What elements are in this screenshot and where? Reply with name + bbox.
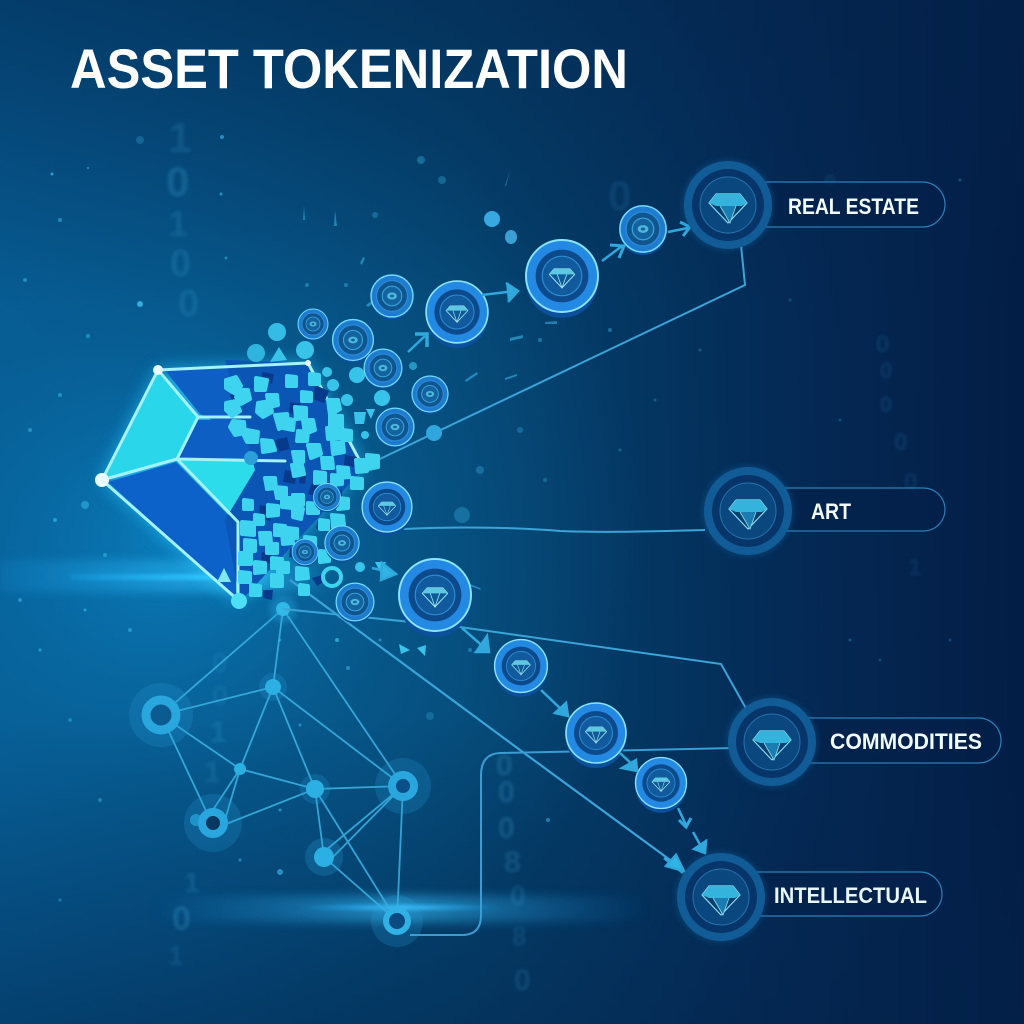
horizontal light flare, left <box>0 560 330 592</box>
node icon <box>702 465 794 557</box>
coin <box>364 349 402 389</box>
arrow <box>408 334 427 352</box>
label pill <box>740 182 945 227</box>
background binary digit columns: 1 <box>210 716 227 749</box>
coin <box>314 484 340 512</box>
network node: small center-left <box>234 763 246 775</box>
background binary digit columns: 1 <box>168 114 191 161</box>
background binary digit columns: 0 <box>496 749 513 782</box>
network node: center <box>300 774 330 804</box>
gem facet: top blue <box>164 363 345 455</box>
background binary digit columns: 0 <box>212 647 228 678</box>
arrow <box>541 690 568 716</box>
gem right dark side <box>225 360 365 602</box>
background binary digit columns: 0 <box>876 331 889 358</box>
label: COMMODITIES <box>830 729 982 754</box>
background binary digit columns: 0 <box>170 243 191 285</box>
network node: top hub <box>269 595 297 623</box>
connector: bottom node to commodities <box>410 748 735 935</box>
coin <box>636 758 686 813</box>
background binary digit columns: 8 <box>504 846 521 879</box>
gem small triangle <box>217 568 231 582</box>
label: ART <box>811 499 851 524</box>
gem: shattering diamond <box>95 360 378 609</box>
background binary digit columns: 1 <box>204 756 221 789</box>
coin <box>362 482 412 536</box>
label pill <box>735 872 942 916</box>
connector: to intellectual <box>290 580 681 868</box>
background binary digit columns: 0 <box>880 358 892 383</box>
background binary digit columns: 1 <box>908 554 921 581</box>
coin <box>298 309 328 341</box>
arrow <box>664 855 684 873</box>
coin <box>333 320 373 363</box>
horizontal light flare, bottom <box>150 896 650 922</box>
label: REAL ESTATE <box>788 194 919 219</box>
gem facet: lower blue <box>108 462 236 598</box>
category: real estate <box>682 159 945 251</box>
arrow <box>462 628 489 652</box>
background binary digit columns: 0 <box>904 469 917 496</box>
fragments: cyan <box>226 374 378 595</box>
arrow <box>620 753 637 771</box>
coin <box>399 559 471 637</box>
connector: to commodities <box>283 609 748 712</box>
connector: to real estate <box>363 245 745 467</box>
label pill <box>760 488 945 531</box>
coin <box>325 526 359 562</box>
background binary digit columns <box>166 114 921 997</box>
category: art <box>702 465 945 557</box>
background binary digit columns: 0 <box>178 283 199 325</box>
coin <box>371 275 413 320</box>
background binary digit columns: 1 <box>184 867 200 898</box>
network node: lower left ring <box>184 794 242 852</box>
arrow <box>678 808 691 827</box>
arrow <box>693 832 706 853</box>
network edges <box>161 609 403 921</box>
background binary digit columns: 0 <box>880 392 892 417</box>
background particles <box>18 135 962 902</box>
network node: left ring <box>129 683 193 747</box>
gem facet: middle cyan <box>178 460 285 522</box>
coin <box>336 583 374 623</box>
node icon <box>675 851 767 943</box>
arrow <box>602 245 624 261</box>
gem glow <box>102 363 363 602</box>
gem vertices <box>95 360 311 609</box>
background binary digit columns: 1 <box>168 203 188 244</box>
label pill <box>785 718 1001 763</box>
arrow <box>668 222 690 236</box>
coin <box>292 539 318 567</box>
background binary digit columns: 0 <box>514 964 531 997</box>
background binary digit columns: 8 <box>512 921 526 951</box>
coin <box>620 206 666 255</box>
coin <box>566 703 626 768</box>
background binary digit columns: 0 <box>510 880 526 911</box>
background binary digit columns: 0 <box>498 776 515 809</box>
gem facet: left cyan <box>104 373 198 478</box>
arrow <box>372 563 396 580</box>
arrow <box>482 283 518 302</box>
network graph <box>129 595 431 947</box>
coin <box>526 240 598 318</box>
gem facet: middle blue <box>178 420 300 460</box>
coins: token cluster <box>292 206 686 813</box>
node icon <box>726 696 818 788</box>
connector: to art <box>387 528 705 532</box>
gem outline <box>102 363 363 600</box>
node icon <box>682 159 774 251</box>
title: ASSET TOKENIZATION <box>70 37 628 100</box>
background binary digit columns: 0 <box>498 812 515 845</box>
network node: right ring <box>375 758 431 814</box>
background binary digit columns: 0 <box>894 429 907 456</box>
loose particles around gem <box>244 211 517 656</box>
background binary digit columns: 0 <box>166 158 189 205</box>
coin <box>426 281 488 348</box>
category: commodities <box>726 696 1001 788</box>
category: intellectual <box>675 851 942 943</box>
coin <box>412 376 448 414</box>
label: INTELLECTUAL <box>774 883 927 908</box>
dark fragments <box>230 372 357 600</box>
network node: lower center <box>305 838 343 876</box>
coin <box>495 640 547 697</box>
arrows along token path <box>372 222 706 873</box>
background binary digit columns: 1 <box>168 940 184 971</box>
background binary digit columns: 0 <box>608 172 631 219</box>
background binary digit columns: 0 <box>212 680 228 711</box>
network node: bottom ring <box>371 895 423 947</box>
coin <box>376 408 414 448</box>
network node: upper center <box>259 673 287 701</box>
background binary digit columns: 0 <box>172 900 191 938</box>
